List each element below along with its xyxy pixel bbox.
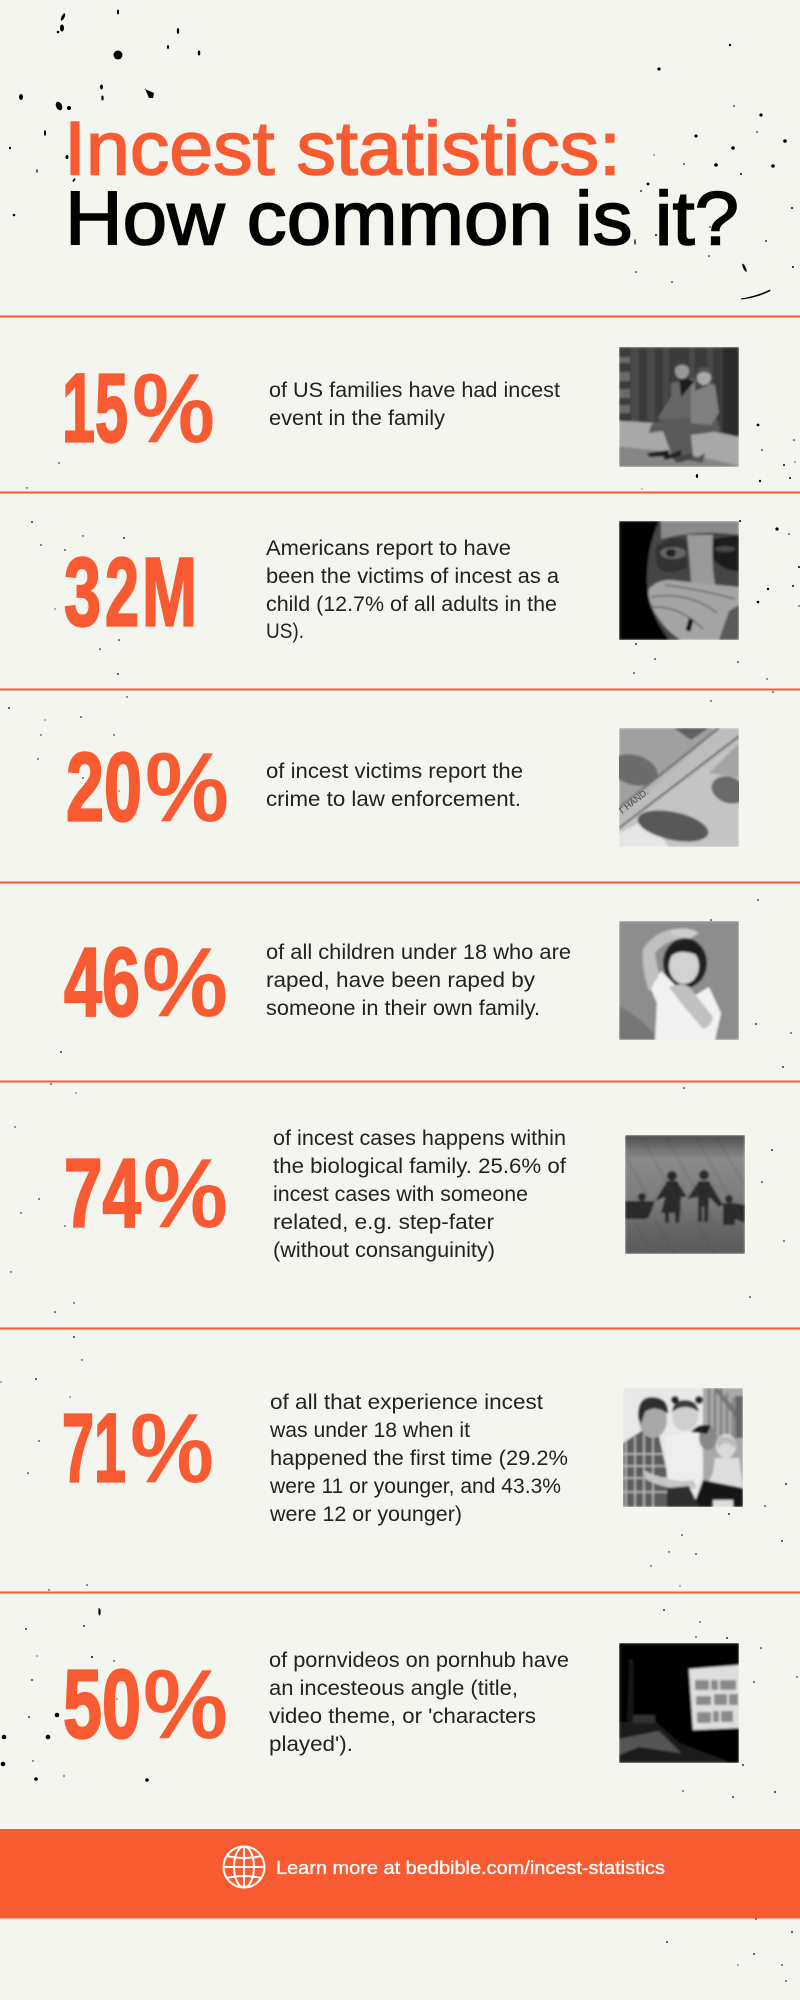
photo: fingerprints on a card [616,728,739,847]
stat description: related, e.g. step-fater [273,1211,494,1234]
photo: child measuring height [619,921,739,1040]
panel: 74% [64,1127,745,1262]
stat number: % [142,927,228,1037]
stat number: 3 [64,538,101,646]
card label text: T HAND. [616,787,650,817]
stat description [269,1391,568,1526]
stat number: 46 [64,928,140,1036]
stat number: % [132,353,215,463]
stat number: % [143,1649,228,1759]
panel: 32M [64,521,739,646]
stat number [63,1649,228,1759]
panel: 50% [63,1643,739,1763]
stat description: someone in their own family. [266,997,540,1020]
stat description: of pornvideos on pornhub have [269,1649,569,1672]
stat number: % [130,1393,214,1503]
stat description: Americans report to have [266,537,511,560]
stat description: US). [266,620,304,643]
panel: 15% [62,347,739,467]
panel: 20% [66,728,750,847]
stat number [64,538,197,646]
stat description [269,1649,569,1756]
stat description: of incest cases happens within [273,1127,566,1150]
stat description: of all children under 18 who are [266,941,571,964]
stat description [266,941,571,1020]
panel: 71% [62,1388,743,1526]
stat description: the biological family. 25.6% of [273,1155,566,1178]
stat description: video theme, or 'characters [269,1705,536,1728]
footer banner [0,1829,800,1918]
title [64,106,739,262]
stat description: an incesteous angle (title, [269,1677,518,1700]
stat number: 20 [66,732,142,842]
panel: 46% [64,921,739,1040]
title line: how common is it: How common is it? [65,176,739,262]
stat description: happened the first time (29.2% [270,1447,568,1470]
stat description: played'). [269,1733,353,1756]
stat description: was under 18 when it [269,1419,470,1442]
stat number: 71 [62,1394,126,1502]
stat description [273,1127,566,1262]
photo: paper family silhouette in rain [625,1135,745,1254]
stat description: incest cases with someone [273,1183,528,1206]
stat description [269,379,560,430]
stat number: % [145,732,229,842]
stat number: M [142,538,197,646]
photo: two boys on a log [619,347,739,467]
photo: family of four [623,1388,743,1507]
stat description [266,537,559,643]
stat description: of US families have had incest [269,379,560,402]
stat description: been the victims of incest as a [266,565,559,588]
icon: globe [224,1846,264,1888]
stat description: (without consanguinity) [273,1239,495,1262]
stat number: 74 [64,1138,141,1248]
stat description: were 12 or younger) [269,1503,462,1526]
stat number: 15 [62,354,128,462]
photo: man viewing a screen in the dark [619,1643,739,1763]
stat number [62,353,215,463]
stat number: 50 [63,1650,141,1758]
stat number [64,927,228,1037]
stat number [64,1138,228,1248]
photo: woman with hand over mouth [619,521,739,640]
stat description: child (12.7% of all adults in the [266,593,557,616]
stat description: raped, have been raped by [266,969,536,992]
title line: incest statistics: Incest statistics: [64,106,621,192]
stat description: event in the family [269,407,446,430]
stat description: crime to law enforcement. [266,788,521,811]
stat number: % [143,1138,228,1248]
stat description: of all that experience incest [270,1391,543,1414]
stat description: of incest victims report the [266,760,523,783]
stat number [66,732,229,842]
stat number: 2 [105,538,139,646]
stat description: were 11 or younger, and 43.3% [269,1475,561,1498]
stat description [266,760,523,811]
footer link text: Learn more at bedbible.com/incest-statistics [276,1857,665,1878]
